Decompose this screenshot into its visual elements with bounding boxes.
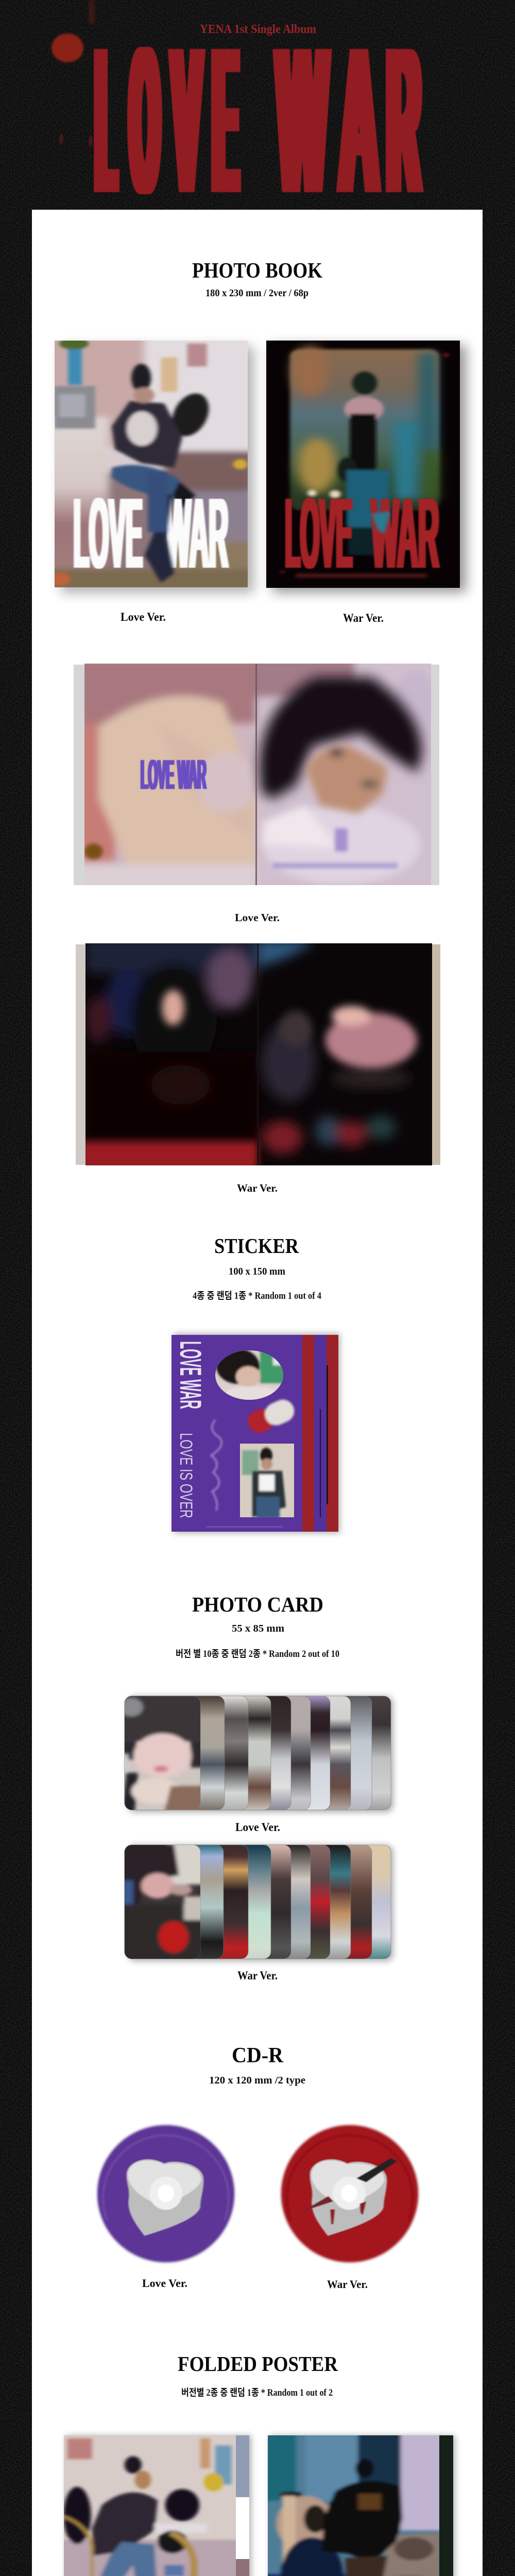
title: LOVE WAR: O [130, 4, 159, 236]
open photobook spread: war version [76, 937, 440, 1171]
photo card random note: 버전 별 10종 중 랜덤 2종 * Random 2 out of 10 [176, 1648, 339, 1659]
photo book cover: war version [266, 341, 460, 589]
album subtitle: YENA 1st Single Album [200, 23, 316, 36]
sticker phrase vertical: LOVE IS OVER [176, 1433, 196, 1518]
title: LOVE WAR: V [172, 4, 201, 236]
cd: love version [96, 2124, 236, 2264]
heart base [127, 2159, 203, 2236]
caption: love spread: Love Ver. [235, 911, 280, 924]
photo cards: love version [120, 1694, 391, 1812]
sticker size text: 100 x 150 mm [229, 1266, 285, 1277]
circular photo [215, 1350, 283, 1400]
open photobook spread: love version [74, 657, 440, 891]
front purple sheet [171, 1335, 302, 1532]
caption: war photo cards: War Ver. [237, 1969, 278, 1982]
cd: war version [280, 2124, 420, 2264]
sticker random note: 4종 중 랜덤 1종 * Random 1 out of 4 [193, 1290, 321, 1301]
header red specks [60, 0, 95, 147]
caption: love photo cards: Love Ver. [235, 1821, 280, 1834]
heading: cd-r: CD-R [232, 2044, 284, 2067]
back sheets [302, 1335, 338, 1532]
photo cards: war version [122, 1842, 391, 1962]
folded poster random note: 버전별 2종 중 랜덤 1종 * Random 1 out of 2 [181, 2387, 333, 2398]
photo card size text: 55 x 85 mm [232, 1623, 284, 1634]
sticker sheets [171, 1335, 338, 1532]
photo book size text: 180 x 230 mm / 2ver / 68p [205, 287, 308, 299]
signature scribble [211, 1420, 221, 1511]
cd size text: 120 x 120 mm /2 type [209, 2075, 305, 2086]
caption: war cover: War Ver. [343, 612, 384, 624]
sticker sheets: LOVE WAR [174, 1341, 207, 1409]
title: LOVE WAR: E [213, 4, 238, 236]
text: WAR [165, 477, 228, 589]
folded poster: love version [59, 2435, 249, 2576]
heading: sticker: STICKER [214, 1234, 299, 1258]
text: LOVE [74, 477, 143, 589]
open photobook spread: love version: LOVE WAR [141, 751, 207, 798]
small print strip [206, 1526, 283, 1528]
front card: love [125, 1696, 200, 1810]
title: LOVE WAR: W [277, 4, 328, 236]
photo book cover: love version [55, 341, 248, 587]
rectangular photo [240, 1444, 294, 1518]
pill [245, 1396, 298, 1436]
caption: war cd: War Ver. [327, 2278, 368, 2291]
heading: photo card: PHOTO CARD [192, 1592, 323, 1616]
title: LOVE WAR: L [96, 4, 116, 236]
caption: love cd: Love Ver. [142, 2277, 187, 2290]
folded poster: war version [263, 2432, 453, 2576]
red dot [52, 33, 83, 62]
heading: photo book: PHOTO BOOK [192, 259, 322, 283]
caption: war spread: War Ver. [237, 1182, 278, 1194]
title: LOVE WAR: A [339, 4, 379, 236]
caption: love cover: Love Ver. [121, 611, 166, 623]
title: LOVE WAR [96, 4, 420, 236]
front card: war [122, 1842, 203, 1962]
heading: folded poster: FOLDED POSTER [178, 2352, 338, 2376]
